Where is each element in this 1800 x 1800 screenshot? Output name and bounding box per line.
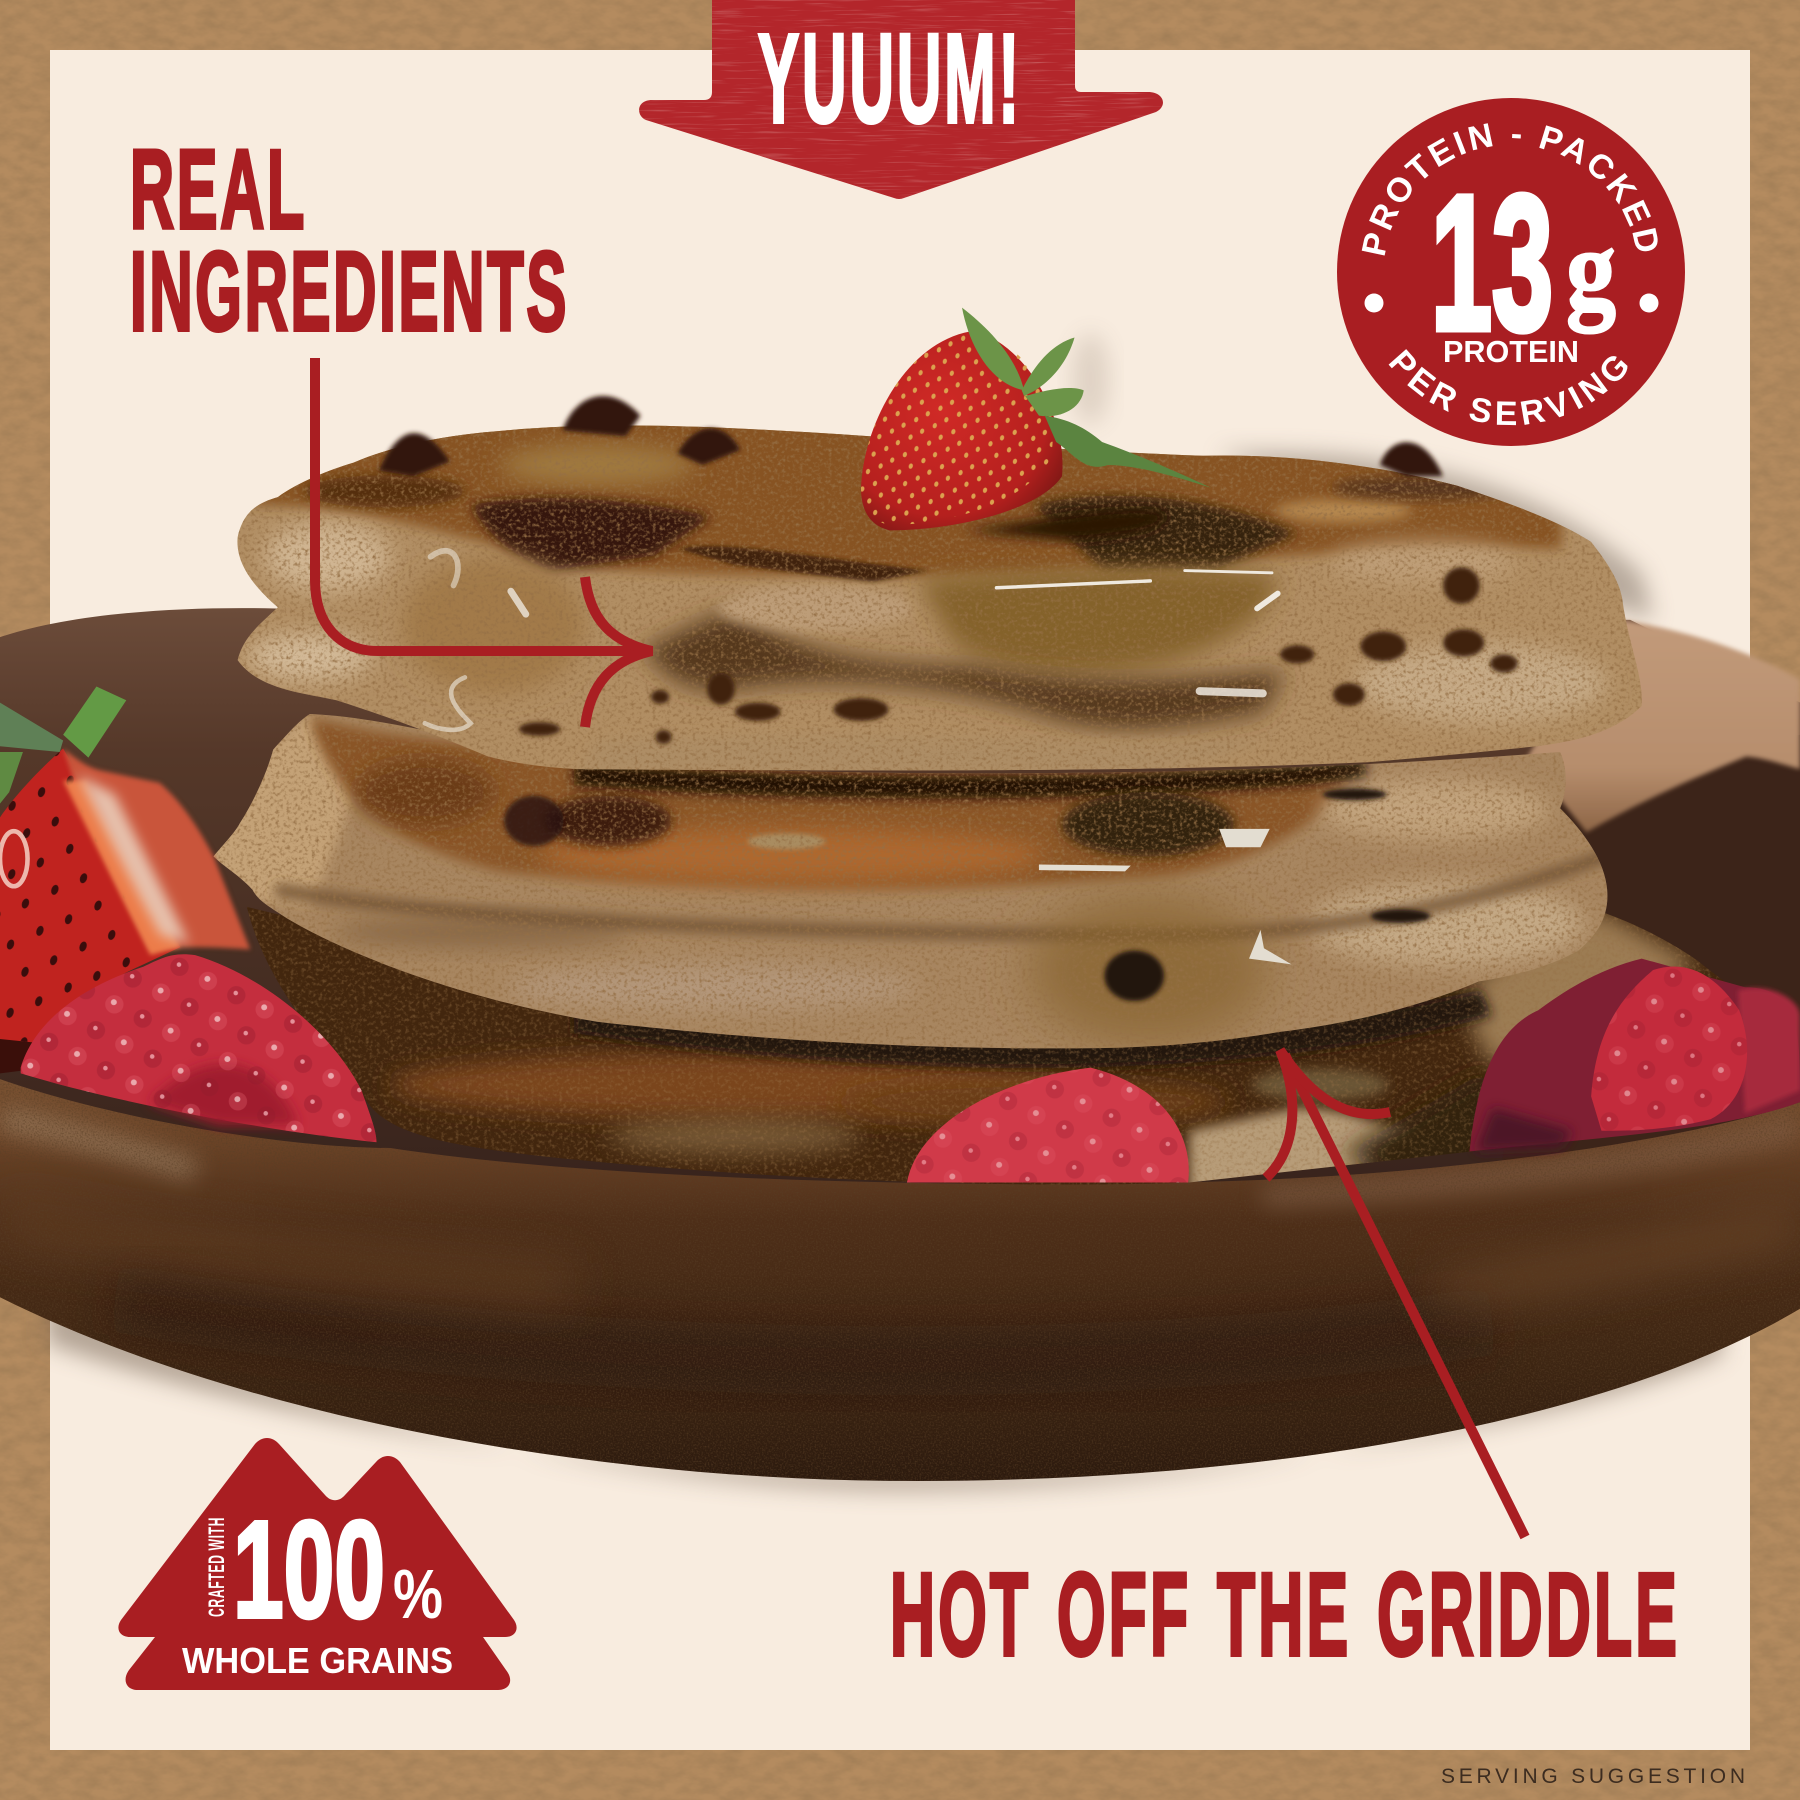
strawberry body <box>861 331 1063 530</box>
top pancake bottom crumb <box>574 735 1263 781</box>
middle pancake <box>207 700 1630 1068</box>
top pancake char left <box>304 475 465 507</box>
top pancake lit lower left lobe <box>247 634 373 680</box>
middle pancake lit right bottom <box>1309 883 1584 965</box>
strawberry on top <box>861 308 1211 540</box>
plate rim highlight right <box>1263 1127 1800 1196</box>
middle pancake char left edge <box>356 760 494 824</box>
middle pancake dark griddle seam <box>574 760 1366 798</box>
raspberry middle <box>907 1068 1189 1182</box>
strawberry cut flesh <box>63 748 250 949</box>
middle pancake syrup run <box>1027 895 1269 1045</box>
plate inner bowl <box>0 608 1800 1263</box>
top pancake syrup gloss <box>425 551 1278 730</box>
badge arc text top: PROTEIN - PACKED <box>1362 123 1658 256</box>
banner arrow: yuuum <box>630 0 1170 205</box>
whole grains: WHOLE GRAINS <box>182 1640 453 1681</box>
raspberry right bright cluster <box>1591 967 1747 1131</box>
mountain shape <box>118 1438 517 1690</box>
strawberry dark underside <box>0 987 69 1073</box>
badge protein: PROTEIN <box>1443 334 1579 369</box>
heading: real ingredients <box>130 127 569 354</box>
middle pancake crumb <box>207 700 1630 1068</box>
plate inner right shadow <box>1492 735 1800 1263</box>
heading: real ingredients: REAL <box>130 127 307 252</box>
raspberry right far lobe <box>1738 988 1800 1114</box>
top pancake char right of berry <box>1033 496 1297 568</box>
raspberry right shadow <box>1475 1108 1573 1151</box>
middle pancake syrup gloss <box>1039 829 1292 964</box>
badge g: g <box>1566 206 1616 333</box>
plate wood light band right <box>1435 1223 1800 1292</box>
top pancake char band <box>677 546 930 582</box>
strawberry glare <box>0 831 28 886</box>
banner arrow: yuuum: YUUUM! <box>758 8 1022 149</box>
arrow: real ingredients pointer <box>315 358 652 727</box>
top pancake air holes <box>519 567 1518 744</box>
bottom pancake shadow under stack <box>574 990 1492 1068</box>
plate rim highlight left <box>0 1119 195 1171</box>
raspberry right dark lobe <box>1469 959 1800 1151</box>
top pancake char far right <box>1332 476 1515 499</box>
middle pancake char left <box>545 796 672 846</box>
top pancake lit crumb centre <box>718 585 913 631</box>
top pancake lit crumb upper right <box>1332 542 1515 583</box>
top pancake syrup left <box>402 557 585 695</box>
strawberry flesh orange band <box>63 781 180 955</box>
percent: % <box>393 1555 443 1633</box>
top pancake syrup sheet <box>918 568 1276 673</box>
strawberry leaves <box>962 308 1211 488</box>
top pancake lit crumb right <box>1355 644 1607 722</box>
middle pancake lit right top <box>1320 779 1550 839</box>
serving suggestion note: SERVING SUGGESTION <box>1441 1765 1745 1788</box>
bottom pancake dark right underside <box>1336 1072 1486 1165</box>
strawberry stain <box>964 510 1165 540</box>
plate wood grain dark band <box>115 1297 1492 1361</box>
raspberry left <box>21 954 377 1142</box>
bottom pancake pale crumb <box>608 1118 861 1155</box>
strawberry left skin <box>0 748 180 1044</box>
middle pancake pale center <box>747 833 825 850</box>
middle pancake char centre <box>1062 792 1234 856</box>
middle pancake lit left bottom <box>505 964 918 1010</box>
top pancake golden patch <box>499 444 695 486</box>
strawberry white core <box>78 775 189 944</box>
strawberry soft shadow <box>1072 333 1109 425</box>
food photo: pancakes on a wooden plate <box>0 308 1800 1492</box>
bottom pancake toasted rust <box>390 1053 1079 1117</box>
badge: 100% whole grains <box>118 1438 517 1690</box>
top pancake <box>230 413 1653 781</box>
middle pancake crease line <box>276 855 1607 936</box>
badge arc text bottom: PER SERVING <box>1388 349 1628 426</box>
bottom pancake lit right lobe <box>1458 913 1699 1068</box>
chocolate chips on top of stack <box>379 396 1443 476</box>
plate grain <box>0 1068 1800 1492</box>
middle pancake chips <box>504 789 1430 1001</box>
bottom pancake <box>247 907 1724 1184</box>
badge dots <box>1364 294 1658 312</box>
crafted with: CRAFTED WITH <box>204 1517 229 1617</box>
strawberry left leaf <box>0 703 63 752</box>
bottom pancake rust lower <box>838 1079 1228 1125</box>
strawberry cut on the left <box>0 687 250 1073</box>
middle pancake brown crust <box>310 718 1355 889</box>
plate front face <box>0 1079 1800 1481</box>
100: 100 <box>233 1493 385 1647</box>
plate drop shadow <box>46 1297 1722 1490</box>
top pancake lit left lobe <box>264 522 390 591</box>
badge: 13g protein <box>1337 98 1685 446</box>
plate surface details <box>0 1068 1800 1492</box>
stack shadow on panel <box>1217 453 1653 620</box>
top pancake crumb texture <box>230 413 1653 781</box>
bottom pancake olive patch <box>1251 1069 1389 1101</box>
badge circle <box>1337 98 1685 446</box>
heading: real ingredients: INGREDIENTS <box>130 229 569 354</box>
bottom pancake pale crumb right <box>1189 1108 1424 1194</box>
top pancake crust <box>253 413 1561 576</box>
top pancake char centre left <box>471 498 712 571</box>
strawberry left stem <box>63 687 126 758</box>
plate rim right, sunlit <box>1527 619 1800 832</box>
plate wood light band left <box>0 1217 574 1286</box>
top pancake syrup drip band <box>643 611 1286 729</box>
badge 13: 13 <box>1431 155 1553 370</box>
middle pancake left ruffle <box>207 712 356 907</box>
bottom pancake crumb <box>230 895 1745 1205</box>
top pancake right golden patch <box>1274 499 1412 522</box>
middle pancake crease shadow left <box>333 918 631 946</box>
raspberry right <box>1469 959 1800 1151</box>
arrow: griddle pointer <box>1266 1050 1525 1537</box>
middle pancake orange toast <box>540 828 1045 883</box>
